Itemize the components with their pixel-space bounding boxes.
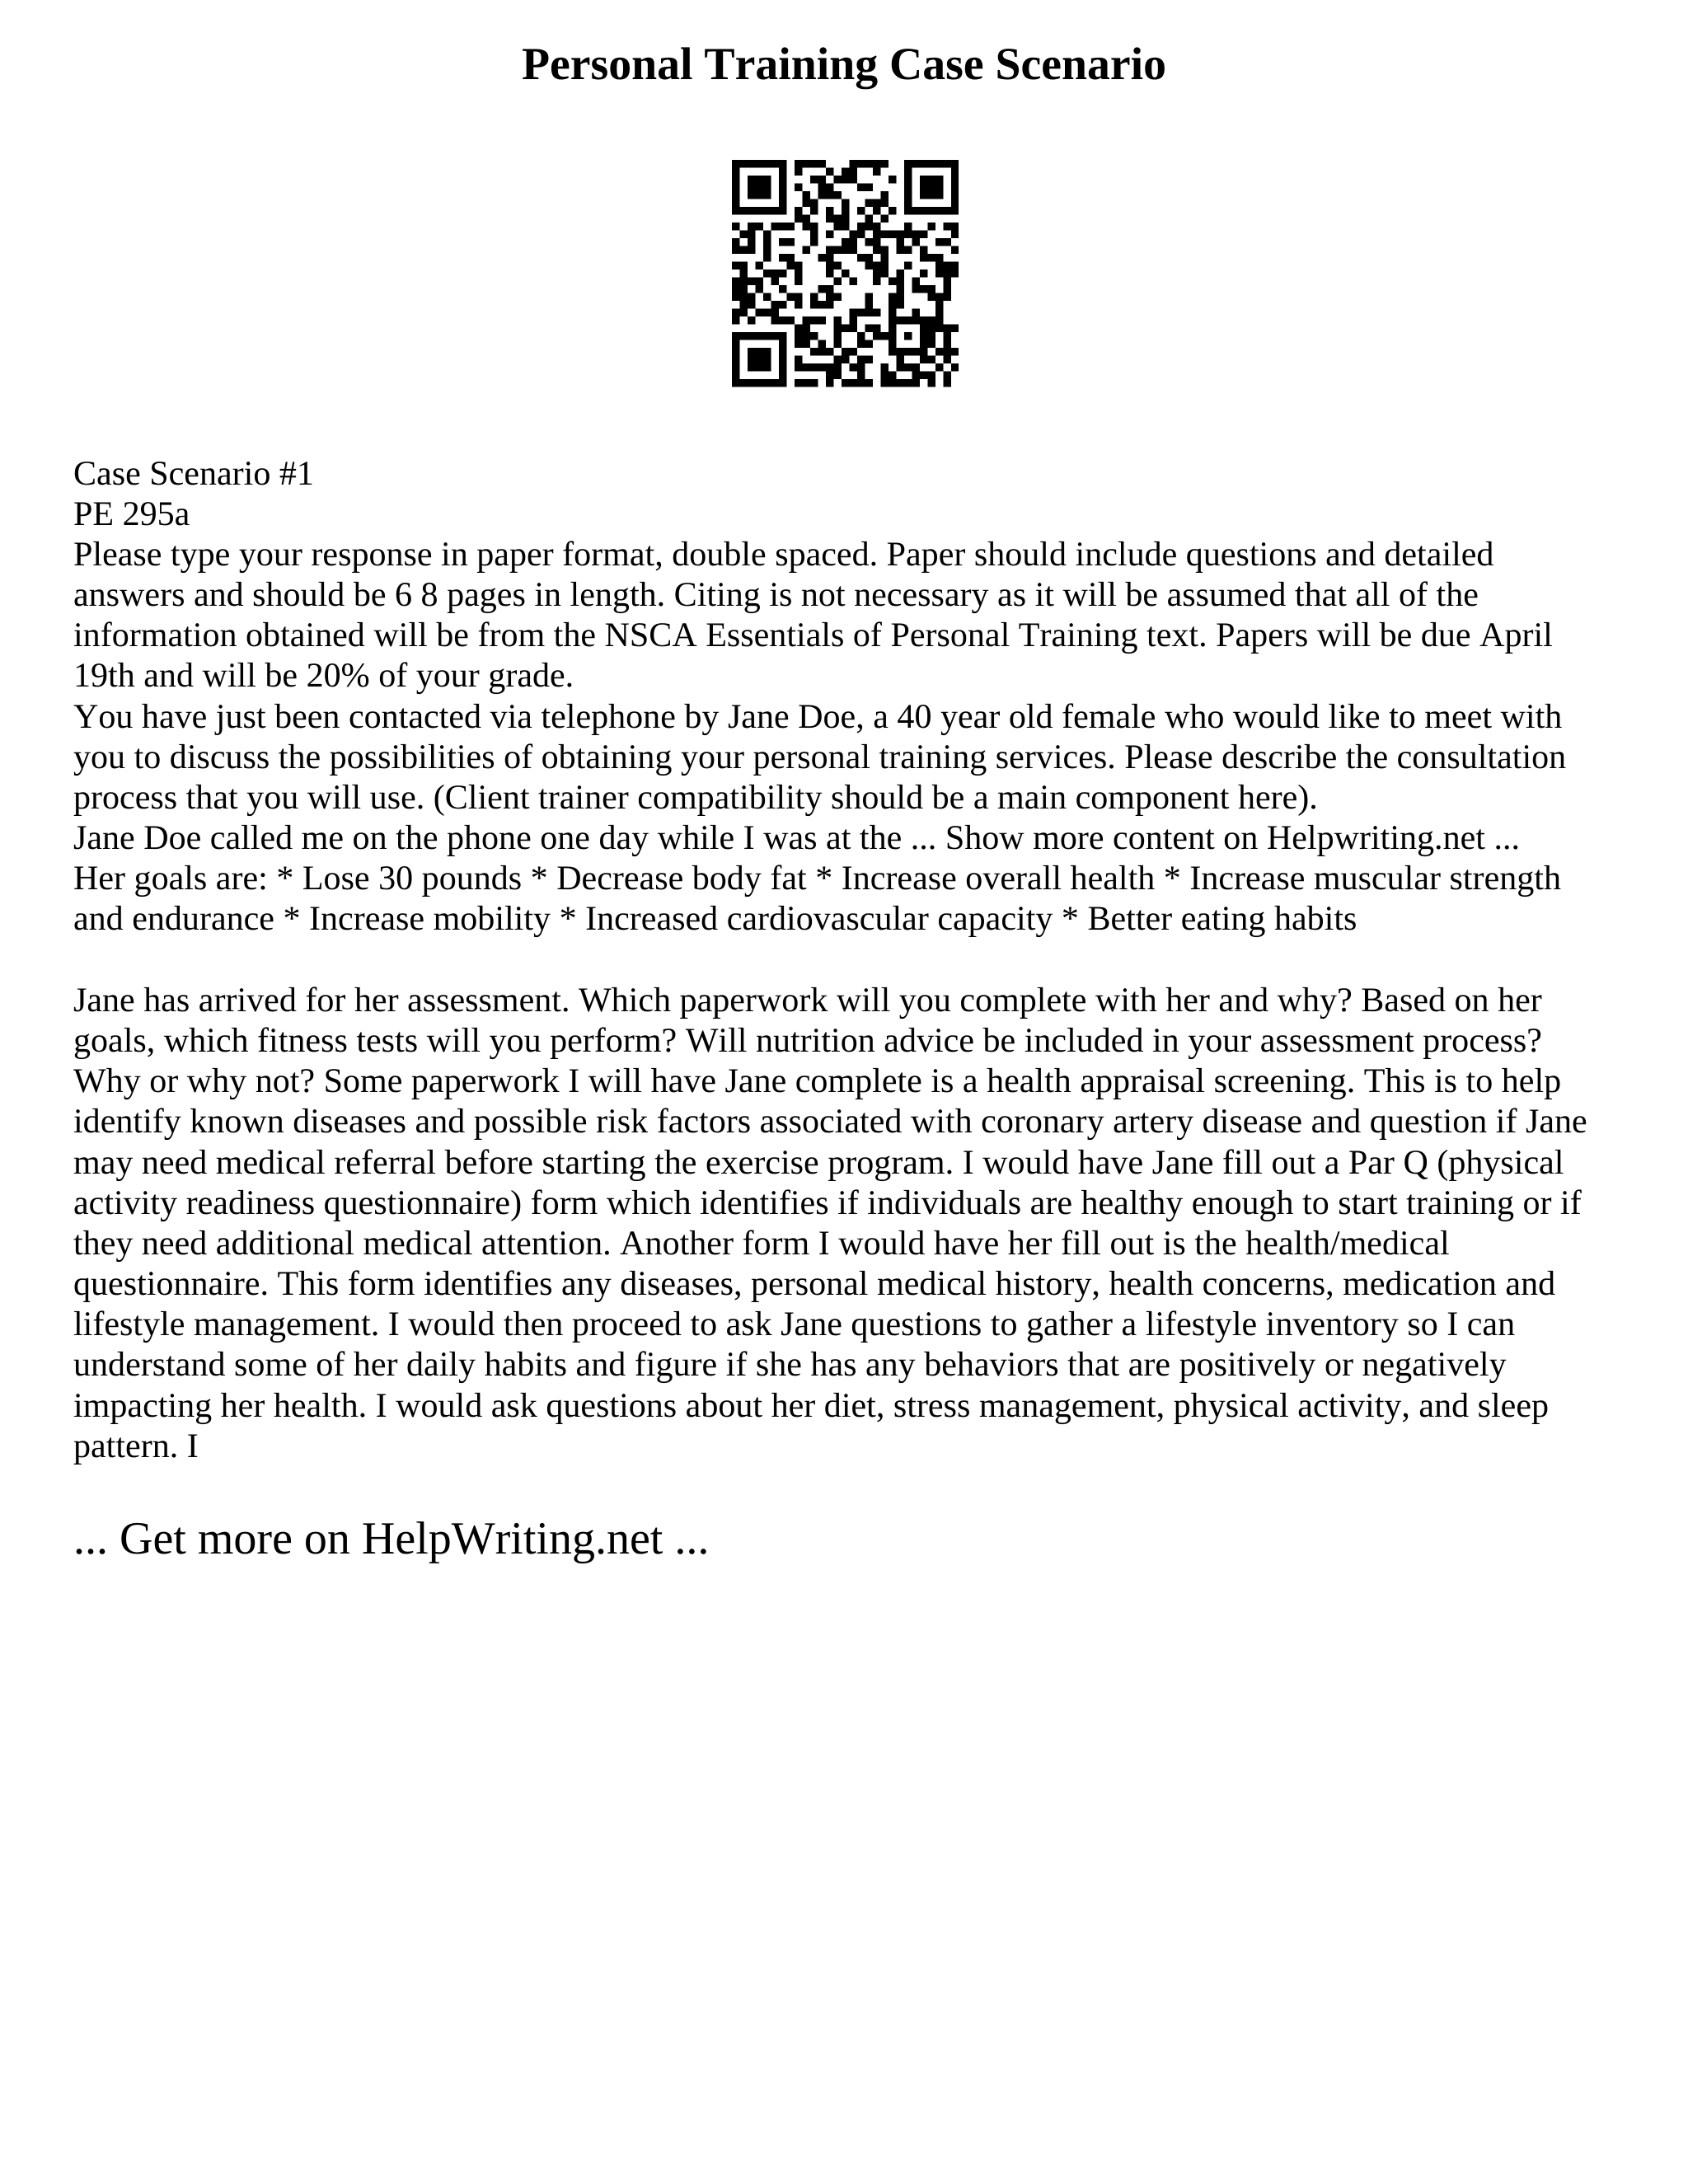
text block: assignment brief and goals: answers and should be 6 8 pages in length. Citing is not necessary as it will be assumed that all of the	[73, 576, 1479, 614]
text block: assessment answer	[73, 982, 1587, 1465]
text block: assignment brief and goals: 19th and will be 20% of your grade.	[73, 657, 574, 695]
text block: assignment brief and goals: Case Scenario #1	[73, 455, 314, 493]
text block: assignment brief and goals	[73, 455, 1566, 938]
text block: assessment answer: Jane has arrived for her assessment. Which paperwork will you complete with her and why? Based on her	[73, 982, 1542, 1019]
text block: assignment brief and goals: information obtained will be from the NSCA Essentials of Personal Training text. Papers will be due April	[73, 616, 1553, 654]
text block: assessment answer: impacting her health. I would ask questions about her diet, stress management, physical activity, and sleep	[73, 1387, 1549, 1425]
text block: assignment brief and goals: You have just been contacted via telephone by Jane Doe, a 40 year old female who would like to meet with	[73, 698, 1562, 736]
call to action link text: ... Get more on HelpWriting.net ...	[73, 1513, 709, 1564]
text block: assignment brief and goals: Please type your response in paper format, double spaced. Paper should include questions and detailed	[73, 536, 1493, 574]
QR code	[732, 160, 959, 387]
text block: assessment answer: questionnaire. This form identifies any diseases, personal medical history, health concerns, medication and	[73, 1265, 1555, 1303]
text block: assessment answer: identify known diseases and possible risk factors associated with coronary artery disease and question if Jane	[73, 1103, 1587, 1141]
text block: assessment answer: lifestyle management. I would then proceed to ask Jane questions to gather a lifestyle inventory so I can	[73, 1305, 1515, 1343]
text block: assessment answer: may need medical referral before starting the exercise program. I would have Jane fill out a Par Q (physical	[73, 1144, 1564, 1182]
text block: assignment brief and goals: PE 295a	[73, 495, 190, 533]
text block: assessment answer: they need additional medical attention. Another form I would have her fill out is the health/medical	[73, 1225, 1450, 1263]
text block: assessment answer: pattern. I	[73, 1427, 199, 1465]
text block: assessment answer: understand some of her daily habits and figure if she has any behaviors that are positively or negatively	[73, 1346, 1507, 1384]
text block: assessment answer: activity readiness questionnaire) form which identifies if individuals are healthy enough to start training or if	[73, 1184, 1582, 1222]
text block: assessment answer: Why or why not? Some paperwork I will have Jane complete is a health appraisal screening. This is to help	[73, 1062, 1561, 1100]
text block: assessment answer: goals, which fitness tests will you perform? Will nutrition advice be included in your assessment process?	[73, 1022, 1542, 1060]
text block: assignment brief and goals: process that you will use. (Client trainer compatibility should be a main component here).	[73, 779, 1318, 817]
text block: assignment brief and goals: Jane Doe called me on the phone one day while I was at the ... Show more content on Helpwriting.net ...	[73, 819, 1520, 857]
text block: assignment brief and goals: you to discuss the possibilities of obtaining your personal training services. Please describe the consultation	[73, 738, 1566, 776]
text block: assignment brief and goals: and endurance * Increase mobility * Increased cardiovascular capacity * Better eating habits	[73, 900, 1357, 938]
title: Personal Training Case Scenario	[522, 39, 1166, 90]
text block: assignment brief and goals: Her goals are: * Lose 30 pounds * Decrease body fat * Increase overall health * Increase muscular strength	[73, 860, 1561, 898]
